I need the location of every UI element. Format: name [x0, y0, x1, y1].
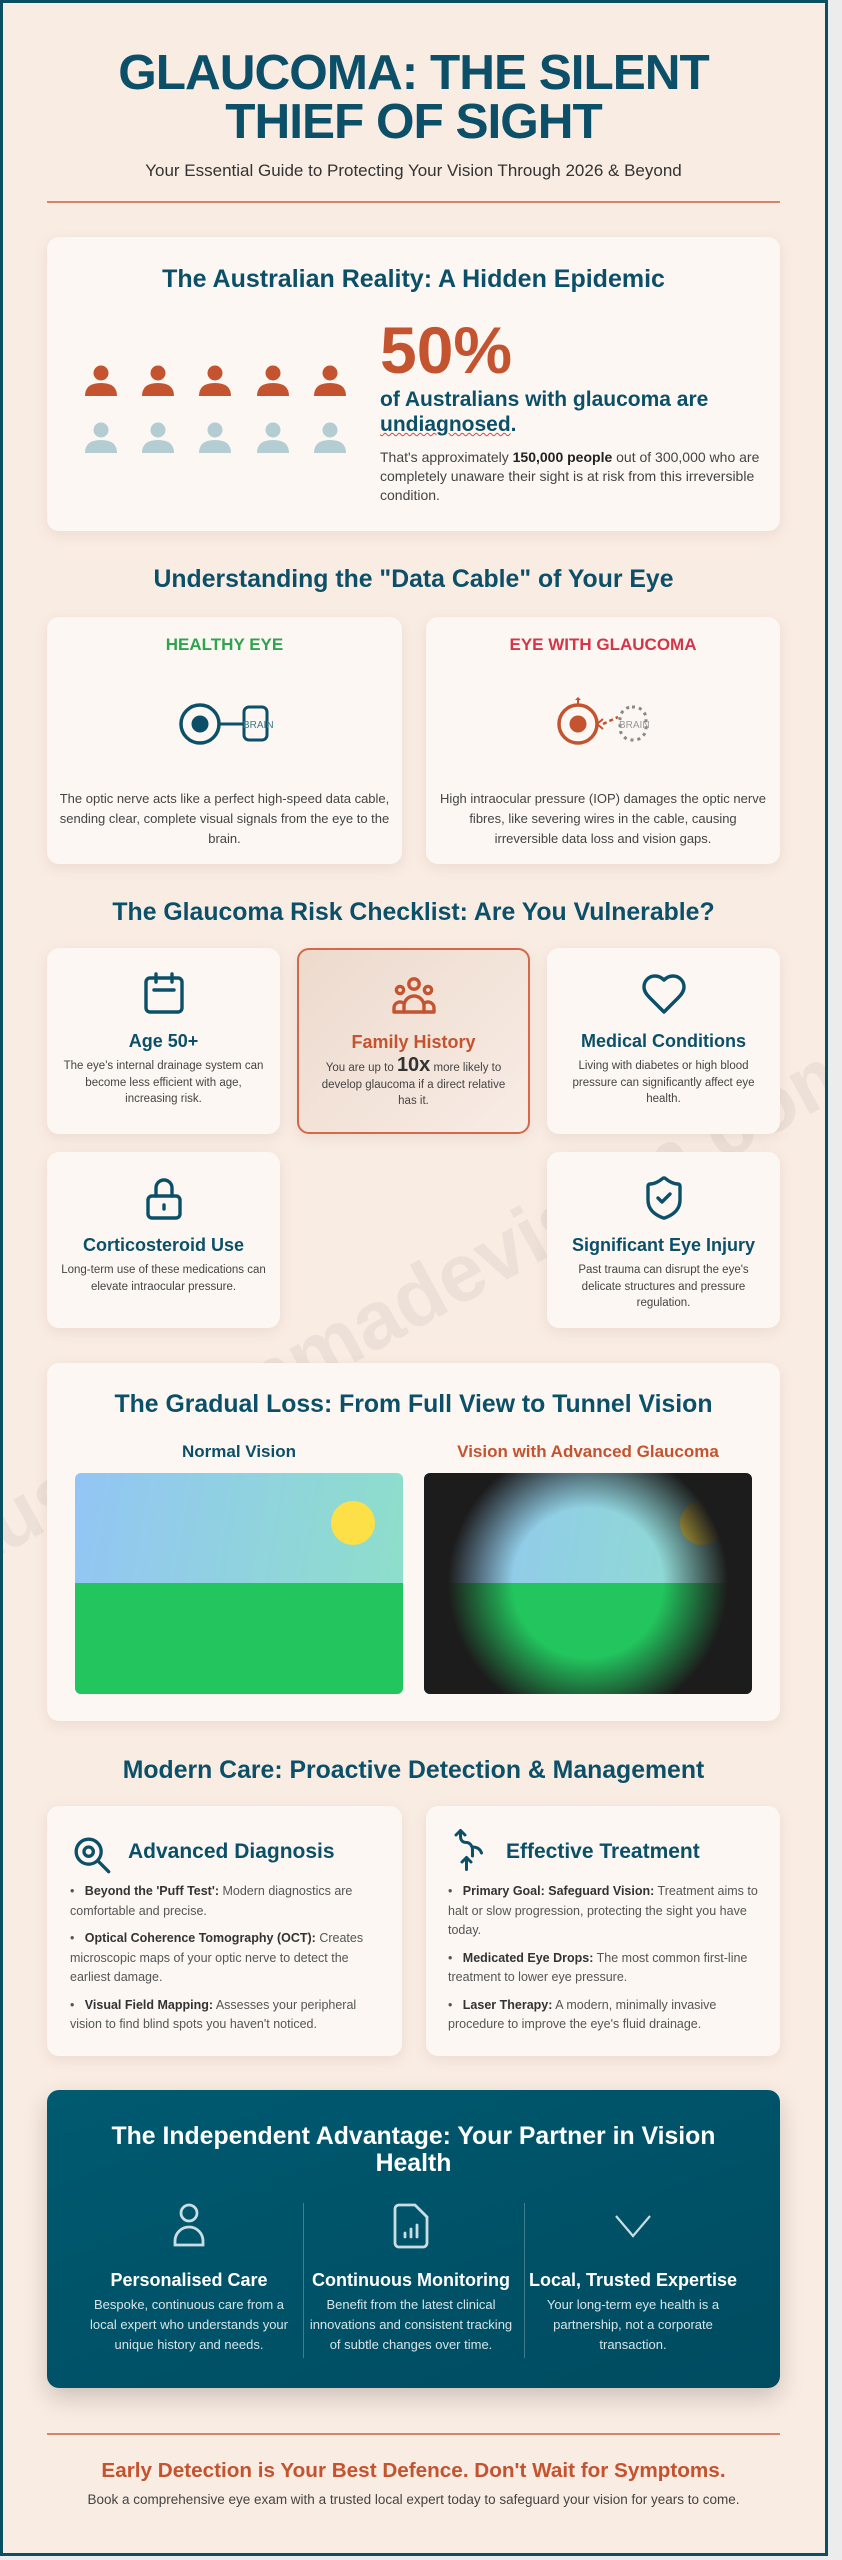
panel: age 50+: The eye's internal drainage system can become less efficient with age, increasing risk.: [64, 1060, 263, 1105]
heading: Australian reality: The Australian Reality: A Hidden Epidemic: [162, 265, 665, 293]
panel: advanced diagnosis: • Optical Coherence Tomography (OCT): Creates microscopic maps of your optic nerve to detect the earliest damage.: [70, 1931, 363, 1984]
column: continuous monitoring: [310, 2204, 512, 2352]
panel: corticosteroid: [47, 1152, 280, 1328]
panel: effective treatment: • Laser Therapy: A modern, minimally invasive procedure to improve the eye's fluid drainage.: [448, 1998, 716, 2031]
panel: eye injury: Significant Eye Injury: [572, 1235, 755, 1255]
panel: effective treatment: Effective Treatment: [506, 1840, 700, 1863]
panel: eye injury: Past trauma can disrupt the eye's delicate structures and pressure regulation.: [578, 1264, 749, 1309]
panel: age 50+: Age 50+: [129, 1031, 198, 1051]
panel: independent advantage: [47, 2090, 780, 2388]
subtitle: Your Essential Guide to Protecting Your Vision Through 2026 & Beyond: [145, 161, 682, 180]
panel: advanced diagnosis: [47, 1806, 402, 2056]
panel: glaucoma eye: High intraocular pressure (IOP) damages the optic nerve fibres, like severing wires in the cable, causing irreversible data loss and vision gaps.: [440, 791, 766, 846]
column: local expertise: Your long-term eye health is a partnership, not a corporate transaction.: [547, 2297, 719, 2352]
panel: advanced diagnosis: • Beyond the 'Puff Test': Modern diagnostics are comfortable and precise.: [70, 1884, 352, 1918]
icon: healthy eye to brain: BRAIN: [243, 720, 274, 731]
title: GLAUCOMA: THE SILENT: [118, 45, 709, 100]
panel: glaucoma eye: [426, 617, 780, 864]
icon: damaged eye: [557, 697, 650, 745]
icon: damaged eye: BRAIN: [619, 720, 650, 731]
panel: advanced diagnosis: Advanced Diagnosis: [128, 1840, 335, 1863]
column: personalised care: Personalised Care: [110, 2270, 268, 2290]
panel: gradual loss: The Gradual Loss: From Full View to Tunnel Vision: [115, 1391, 712, 1418]
column: local expertise: [529, 2215, 737, 2352]
panel: effective treatment: [426, 1806, 780, 2056]
panel: healthy eye: HEALTHY EYE: [166, 635, 283, 654]
panel: family history: [297, 948, 530, 1134]
panel: effective treatment: • Medicated Eye Drops: The most common first-line treatment to lower eye pressure.: [448, 1950, 747, 1984]
text: stat details: That's approximately 150,000 people out of 300,000 who are completely unaware their sight is at risk from this irreversible condition.: [380, 449, 759, 503]
stat caption: of Australians with glaucoma are undiagnosed.: [380, 388, 708, 436]
panel: Australian reality: [47, 237, 780, 531]
panel: gradual loss: Normal Vision: [182, 1442, 296, 1461]
panel: gradual loss: Vision with Advanced Glaucoma: [457, 1442, 719, 1461]
icon: healthy eye to brain: [179, 703, 274, 745]
panel: corticosteroid: Corticosteroid Use: [83, 1235, 244, 1255]
panel: medical conditions: [547, 948, 780, 1134]
panel: eye injury: [547, 1152, 780, 1328]
panel: healthy eye: [47, 617, 402, 864]
footer text: Book a comprehensive eye exam with a trusted local expert today to safeguard your vision for years to come.: [87, 2492, 740, 2507]
illustration: normal vision: [75, 1473, 403, 1694]
panel: medical conditions: Medical Conditions: [581, 1031, 746, 1051]
panel: medical conditions: Living with diabetes or high blood pressure can significantly affect eye health.: [573, 1060, 754, 1105]
column: personalised care: [90, 2204, 288, 2352]
heading: data cable: Understanding the "Data Cable" of Your Eye: [154, 566, 674, 593]
panel: family history: You are up to 10x more likely to develop glaucoma if a direct relative has it.: [322, 1054, 505, 1107]
heading: modern care: Modern Care: Proactive Detection & Management: [123, 1757, 704, 1784]
column: continuous monitoring: Benefit from the latest clinical innovations and consistent tracking of subtle changes over time.: [310, 2297, 512, 2352]
panel: corticosteroid: Long-term use of these medications can elevate intraocular pressure.: [61, 1264, 266, 1292]
panel: family history: Family History: [351, 1032, 476, 1052]
stat: 50%: 50%: [380, 313, 512, 387]
footer heading: Early Detection is Your Best Defence. Don't Wait for Symptoms.: [101, 2459, 726, 2482]
column: personalised care: Bespoke, continuous care from a local expert who understands your unique history and needs.: [90, 2297, 288, 2352]
panel: independent advantage: The Independent Advantage: Your Partner in Vision Health: [112, 2123, 715, 2177]
panel: gradual loss: [47, 1363, 780, 1721]
panel: effective treatment: • Primary Goal: Safeguard Vision: Treatment aims to halt or slow progression, protecting the sight you have today.: [448, 1884, 758, 1937]
icon grid: people: [85, 366, 346, 453]
illustration: tunnel vision: [424, 1473, 752, 1694]
title: THIEF OF SIGHT: [225, 94, 602, 149]
title: [118, 45, 710, 149]
panel: glaucoma eye: EYE WITH GLAUCOMA: [510, 635, 696, 654]
column: local expertise: Local, Trusted Expertise: [529, 2270, 737, 2290]
panel: advanced diagnosis: • Visual Field Mapping: Assesses your peripheral vision to find blind spots you haven't noticed.: [70, 1998, 356, 2031]
column: continuous monitoring: Continuous Monitoring: [312, 2270, 510, 2290]
heading: risk checklist: The Glaucoma Risk Checklist: Are You Vulnerable?: [112, 899, 715, 926]
panel: healthy eye: The optic nerve acts like a perfect high-speed data cable, sending clear, complete visual signals from the eye to the brain.: [60, 791, 389, 846]
panel: age 50+: [47, 948, 280, 1134]
